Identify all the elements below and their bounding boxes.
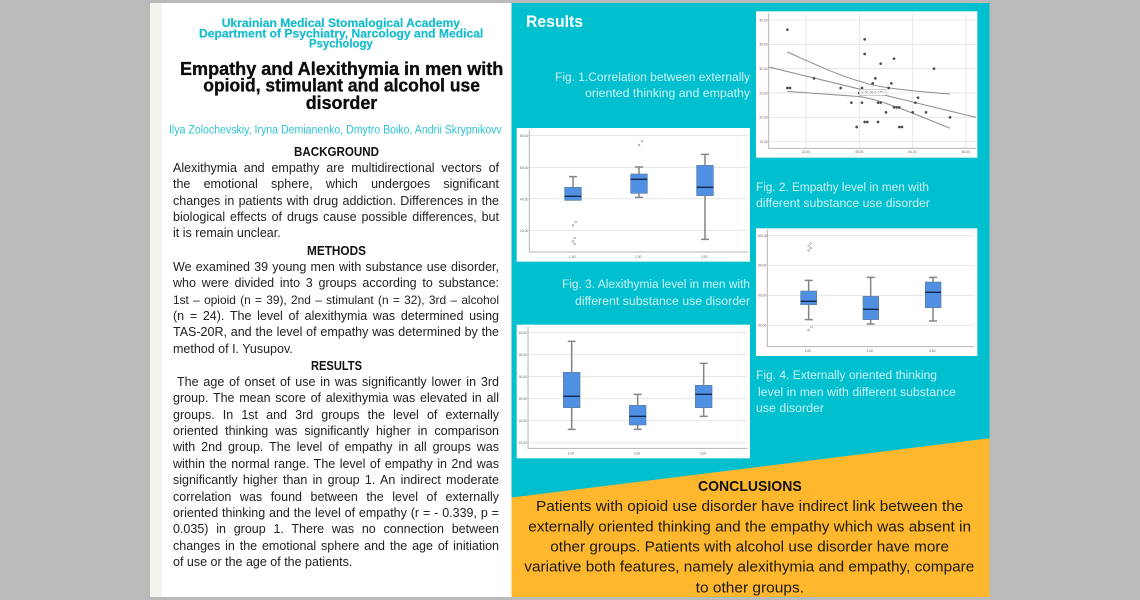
caption: figure 4: level in men with different substance xyxy=(758,385,956,399)
heading: methods: METHODS xyxy=(307,244,366,258)
text: conclusions: variative both features, namely alexithymia and empathy, compare xyxy=(524,559,974,576)
institution heading xyxy=(199,16,483,51)
chart: alexithymia boxplot: 1,00 xyxy=(568,451,574,455)
institution heading: Psychology xyxy=(309,37,373,51)
chart: alexithymia boxplot: 20,00 xyxy=(519,419,527,423)
chart: alexithymia boxplot xyxy=(517,325,750,458)
title: disorder xyxy=(306,92,377,113)
caption: figure 1: Fig. 1.Correlation between externally xyxy=(555,70,751,84)
heading: results: RESULTS xyxy=(311,359,362,373)
chart: externally oriented thinking boxplot: 60,00 xyxy=(758,294,766,298)
chart: alexithymia boxplot: 15,00 xyxy=(519,441,527,445)
text: background: Alexithymia and empathy are multidirectional vectors of xyxy=(173,161,499,175)
text: results: group. The mean score of alexithymia was elevated in all xyxy=(173,391,499,405)
text: results: changes in the emotional sphere and the age of initiation xyxy=(173,539,499,553)
text: results: oriented thinking was significantly higher in comparison xyxy=(173,424,499,438)
text: conclusions xyxy=(524,498,974,596)
heading: background: BACKGROUND xyxy=(294,145,379,159)
authors: Ilya Zolochevskiy, Iryna Demianenko, Dmytro Boiko, Andrii Skrypnikovv xyxy=(169,122,502,136)
chart: externally oriented thinking boxplot: 14 xyxy=(810,325,813,329)
text: conclusions: other groups. Patients with alcohol use disorder have more xyxy=(550,539,949,556)
chart: externally oriented thinking boxplot: 2,00 xyxy=(867,349,873,353)
chart: alexithymia boxplot: 25,00 xyxy=(519,397,527,401)
caption: figure 1 xyxy=(555,70,751,100)
title: opioid, stimulant and alcohol use xyxy=(203,75,480,96)
chart: externally oriented thinking boxplot: 3,00 xyxy=(929,349,936,353)
text: methods: TAS-20R, and the level of empathy was determined by the xyxy=(173,325,499,339)
text: background: biological effects of drugs cause possible differences, but xyxy=(173,210,499,224)
text: methods: who were divided into 3 groups according to substance: xyxy=(173,276,499,290)
chart: empathy boxplot: 60,00 xyxy=(520,166,528,170)
chart: alexithymia boxplot: 2,00 xyxy=(634,451,640,455)
text: background: it is remain unclear. xyxy=(173,226,281,240)
caption: figure 2 xyxy=(756,180,930,210)
chart: scatter plot of empathy vs externally oriented thinking xyxy=(756,11,977,158)
text: results: The age of onset of use in was significantly lower in 3rd xyxy=(177,375,499,389)
institution heading: Ukrainian Medical Stomalogical Academy xyxy=(222,16,460,30)
text: methods: 1st – opioid (n = 39), 2nd – stimulant (n = 32), 3rd – alcohol xyxy=(173,292,499,306)
caption: figure 4: Fig. 4. Externally oriented thinking xyxy=(756,368,937,382)
chart: empathy boxplot: 3,00 xyxy=(701,255,708,259)
chart: empathy boxplot xyxy=(517,128,750,262)
chart: scatter plot of empathy vs externally oriented thinking: 15,00 xyxy=(759,140,768,144)
text: conclusions: Patients with opioid use disorder have indirect link between the xyxy=(536,498,963,515)
text: results: correlation was found between the level of externally xyxy=(173,490,499,504)
title: Empathy and Alexithymia in men with xyxy=(180,58,503,79)
chart: externally oriented thinking boxplot: 40,00 xyxy=(758,324,766,328)
chart: externally oriented thinking boxplot: 100,00 xyxy=(757,234,768,238)
text: results: significantly higher than in group 1. An indirect moderate xyxy=(173,473,499,487)
caption: figure 3 xyxy=(562,277,750,308)
text: methods: method of I. Yusupov. xyxy=(173,342,293,356)
chart: scatter plot of empathy vs externally oriented thinking: 40,00 xyxy=(855,150,863,154)
chart: alexithymia boxplot: 35,00 xyxy=(519,353,527,357)
caption: figure 2: Fig. 2. Empathy level in men with xyxy=(756,180,929,194)
text: methods: (n = 24). The level of alexithymia was determined using xyxy=(173,309,499,323)
text: background xyxy=(173,161,499,240)
chart: empathy boxplot: 80,00 xyxy=(520,134,528,138)
chart: scatter plot of empathy vs externally oriented thinking: 60,00 xyxy=(908,150,917,154)
chart: externally oriented thinking boxplot xyxy=(756,228,977,356)
caption: figure 3: different substance use disorder xyxy=(575,294,750,308)
chart: alexithymia boxplot: 3,00 xyxy=(700,451,706,455)
chart: scatter plot of empathy vs externally oriented thinking: 40,00 xyxy=(759,18,768,22)
heading: conclusions: CONCLUSIONS xyxy=(698,478,802,495)
chart: empathy boxplot: 1,00 xyxy=(569,255,576,259)
chart: empathy boxplot: 20,00 xyxy=(520,229,528,233)
chart: scatter plot of empathy vs externally oriented thinking: 35,00 xyxy=(759,43,768,47)
caption: figure 3: Fig. 3. Alexithymia level in men with xyxy=(562,277,750,291)
chart: scatter plot of empathy vs externally oriented thinking: 80,00 xyxy=(962,150,970,154)
chart: externally oriented thinking boxplot: 1,00 xyxy=(805,349,811,353)
text: methods xyxy=(173,260,499,356)
caption: figure 4 xyxy=(756,368,956,415)
chart: alexithymia boxplot: 40,00 xyxy=(519,331,527,335)
chart: empathy boxplot: 2,00 xyxy=(635,255,642,259)
text: results: of use or the age of the patients. xyxy=(173,555,352,569)
institution heading: Department of Psychiatry, Narcology and Medical xyxy=(199,26,483,40)
caption: figure 4: use disorder xyxy=(756,401,824,415)
text: background: changes in patients with drug addiction. Differences in the xyxy=(173,194,499,208)
title xyxy=(180,58,503,113)
chart: scatter plot of empathy vs externally oriented thinking: 30,00 xyxy=(759,67,768,71)
chart: scatter plot of empathy vs externally oriented thinking: 20,00 xyxy=(759,116,768,120)
text: results: with 2nd group. The level of empathy in all groups was xyxy=(173,440,499,454)
text: methods: We examined 39 young men with substance use disorder, xyxy=(173,260,499,274)
chart: scatter plot of empathy vs externally oriented thinking: 20,00 xyxy=(802,150,810,154)
text: results: groups. In 1st and 3rd groups the level of externally xyxy=(173,408,499,422)
chart: scatter plot of empathy vs externally oriented thinking: 25,00 xyxy=(759,91,768,95)
heading: results panel: Results xyxy=(526,12,583,31)
text: results: within the normal range. The level of empathy in 2nd was xyxy=(173,457,499,471)
chart: scatter plot of empathy vs externally oriented thinking: y=31.69-0.17*x xyxy=(861,91,884,95)
text: conclusions: to other groups. xyxy=(696,579,804,596)
text: results xyxy=(173,375,499,569)
chart: empathy boxplot: 40,00 xyxy=(520,197,528,201)
chart: alexithymia boxplot: 30,00 xyxy=(519,375,527,379)
chart: externally oriented thinking boxplot: 80,00 xyxy=(758,264,766,268)
text: results: 0.035) in group 1. There was no connection between xyxy=(173,522,499,536)
caption: figure 1: oriented thinking and empathy xyxy=(585,86,751,100)
caption: figure 2: different substance use disorder xyxy=(756,196,930,210)
text: conclusions: externally oriented thinking and the empathy which was absent in xyxy=(528,519,971,536)
text: results: oriented thinking and the level of empathy (r = - 0.339, p = xyxy=(173,506,499,520)
text: background: the emotional sphere, which undergoes significant xyxy=(173,177,499,191)
